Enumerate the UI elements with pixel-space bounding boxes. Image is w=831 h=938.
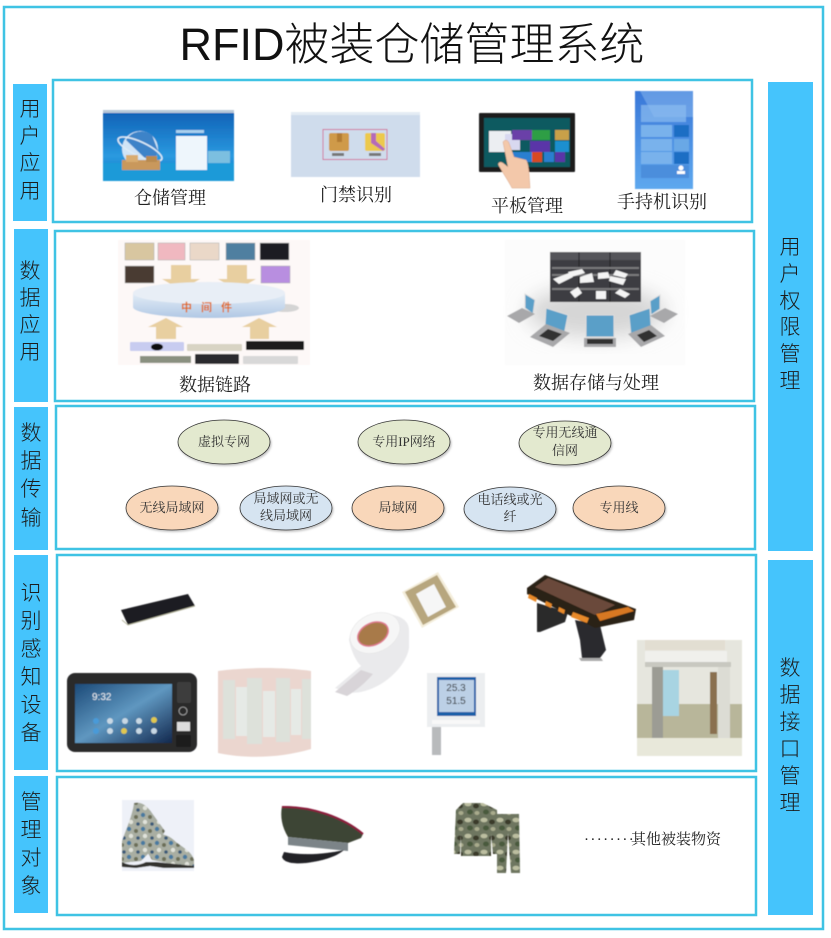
image: camouflage uniform (454, 803, 520, 873)
icon: temperature humidity sensor: 51.5 (446, 696, 466, 707)
right bar: 用户权限管理: 户 (780, 263, 800, 286)
side label: 用户应用 (13, 84, 47, 221)
side label: 管理对象: 管 (20, 791, 42, 814)
side label: 管理对象 (14, 776, 48, 913)
right bar: 数据接口管理: 据 (780, 684, 800, 707)
right bar: 用户权限管理: 用 (780, 236, 800, 259)
icon: temperature humidity sensor: 25.3 (446, 683, 466, 694)
side label: 识别感知设备: 别 (20, 610, 42, 633)
right bar: 数据接口管理: 口 (780, 738, 800, 761)
panel: 识别感知设备 (57, 555, 756, 771)
icon: rugged tablet: 9:32 (92, 692, 112, 703)
node: 无线局域网 (126, 486, 218, 530)
node: 电话线或光纤: 电话线或光 (477, 492, 543, 507)
side label: 数据传输: 传 (20, 478, 42, 501)
side label: 用户应用: 应 (20, 152, 40, 175)
image: peaked army cap (281, 806, 363, 863)
right bar: 数据接口管理: 理 (780, 792, 800, 815)
icon: handheld RFID scanner (527, 575, 636, 661)
image: middleware diagram (118, 240, 310, 365)
node: 专用IP网络: 专用IP网络 (372, 434, 436, 449)
node: 电话线或光纤 (464, 487, 556, 531)
node: 局域网或无线局域网: 线局域网 (260, 508, 312, 523)
right bar: 数据接口管理: 数 (780, 657, 800, 680)
side label: 用户应用: 户 (20, 125, 40, 148)
icon: rugged tablet (67, 673, 197, 752)
side label: 数据传输: 数 (20, 422, 42, 445)
panel: 数据传输 (56, 406, 755, 549)
label: 手持机识别 (617, 192, 707, 212)
label: 仓储管理 (134, 188, 206, 208)
label: 数据链路 (179, 375, 251, 395)
side label: 识别感知设备: 识 (20, 582, 42, 605)
right bar: 用户权限管理 (768, 82, 813, 551)
right bar: 数据接口管理: 接 (780, 711, 800, 734)
right bar: 数据接口管理 (768, 560, 813, 915)
label: ········· (584, 832, 642, 848)
image: middleware diagram: 中间件 (181, 300, 241, 314)
image: tablet with hand (479, 113, 575, 188)
label: 门禁识别 (320, 185, 392, 205)
image: access gate screen (291, 112, 420, 177)
node: 专用无线通信网: 信网 (552, 443, 578, 458)
node: 专用IP网络 (358, 420, 450, 464)
node: 电话线或光纤: 纤 (503, 509, 517, 524)
panel: 用户应用 (53, 80, 752, 222)
right bar: 数据接口管理: 管 (780, 765, 800, 788)
image: handheld app screen (635, 91, 693, 189)
side label: 数据传输: 输 (20, 507, 42, 530)
node: 虚拟专网 (178, 420, 270, 464)
side label: 识别感知设备: 感 (20, 638, 42, 661)
side label: 数据传输: 据 (20, 450, 42, 473)
side label: 数据应用: 应 (20, 314, 40, 337)
image: warehouse login screen (103, 110, 234, 181)
label: 其他被装物资 (631, 830, 722, 848)
panel: 管理对象 (57, 777, 756, 915)
side label: 数据应用 (14, 229, 48, 402)
right bar: 用户权限管理: 理 (780, 370, 800, 393)
node: 局域网或无线局域网: 局域网或无 (253, 491, 319, 506)
side label: 数据传输 (14, 407, 48, 550)
side label: 识别感知设备: 知 (20, 666, 42, 689)
image: camouflage shoes (122, 800, 194, 871)
icon: black RFID tag bar (121, 594, 195, 625)
label: 数据存储与处理 (533, 373, 659, 393)
node: 专用无线通信网: 专用无线通 (532, 425, 598, 440)
node: 局域网: 局域网 (378, 500, 418, 515)
label: 平板管理 (491, 196, 563, 216)
node: 无线局域网: 无线局域网 (139, 500, 205, 515)
panel: 数据应用 (55, 231, 754, 401)
right bar: 用户权限管理: 管 (780, 343, 800, 366)
icon: label roll (335, 605, 409, 696)
icon: temperature humidity sensor (427, 673, 485, 755)
node: 局域网 (352, 486, 444, 530)
side label: 数据应用: 用 (20, 341, 40, 364)
side label: 管理对象: 对 (20, 847, 42, 870)
side label: 管理对象: 理 (20, 819, 42, 842)
node: 专用线: 专用线 (599, 500, 639, 515)
node: 专用无线通信网 (519, 421, 611, 465)
side label: 数据应用: 据 (20, 287, 40, 310)
right bar: 用户权限管理: 权 (780, 290, 800, 313)
node: 专用线 (573, 486, 665, 530)
side label: 数据应用: 数 (20, 260, 40, 283)
icon: UHF tag roll (218, 668, 311, 757)
side label: 识别感知设备: 备 (20, 722, 42, 745)
image: RFID gate door (637, 640, 742, 756)
node: 虚拟专网: 虚拟专网 (198, 434, 250, 449)
side label: 管理对象: 象 (20, 875, 42, 898)
right bar: 用户权限管理: 限 (780, 316, 800, 339)
node: 局域网或无线局域网 (240, 486, 332, 530)
image: servers and laptops (505, 240, 685, 365)
title: RFID被装仓储管理系统 (180, 19, 644, 70)
side label: 用户应用: 用 (20, 180, 40, 203)
side label: 识别感知设备: 设 (20, 694, 42, 717)
icon: square inlay tag (402, 572, 459, 628)
side label: 识别感知设备 (14, 555, 48, 770)
side label: 用户应用: 用 (20, 98, 40, 121)
